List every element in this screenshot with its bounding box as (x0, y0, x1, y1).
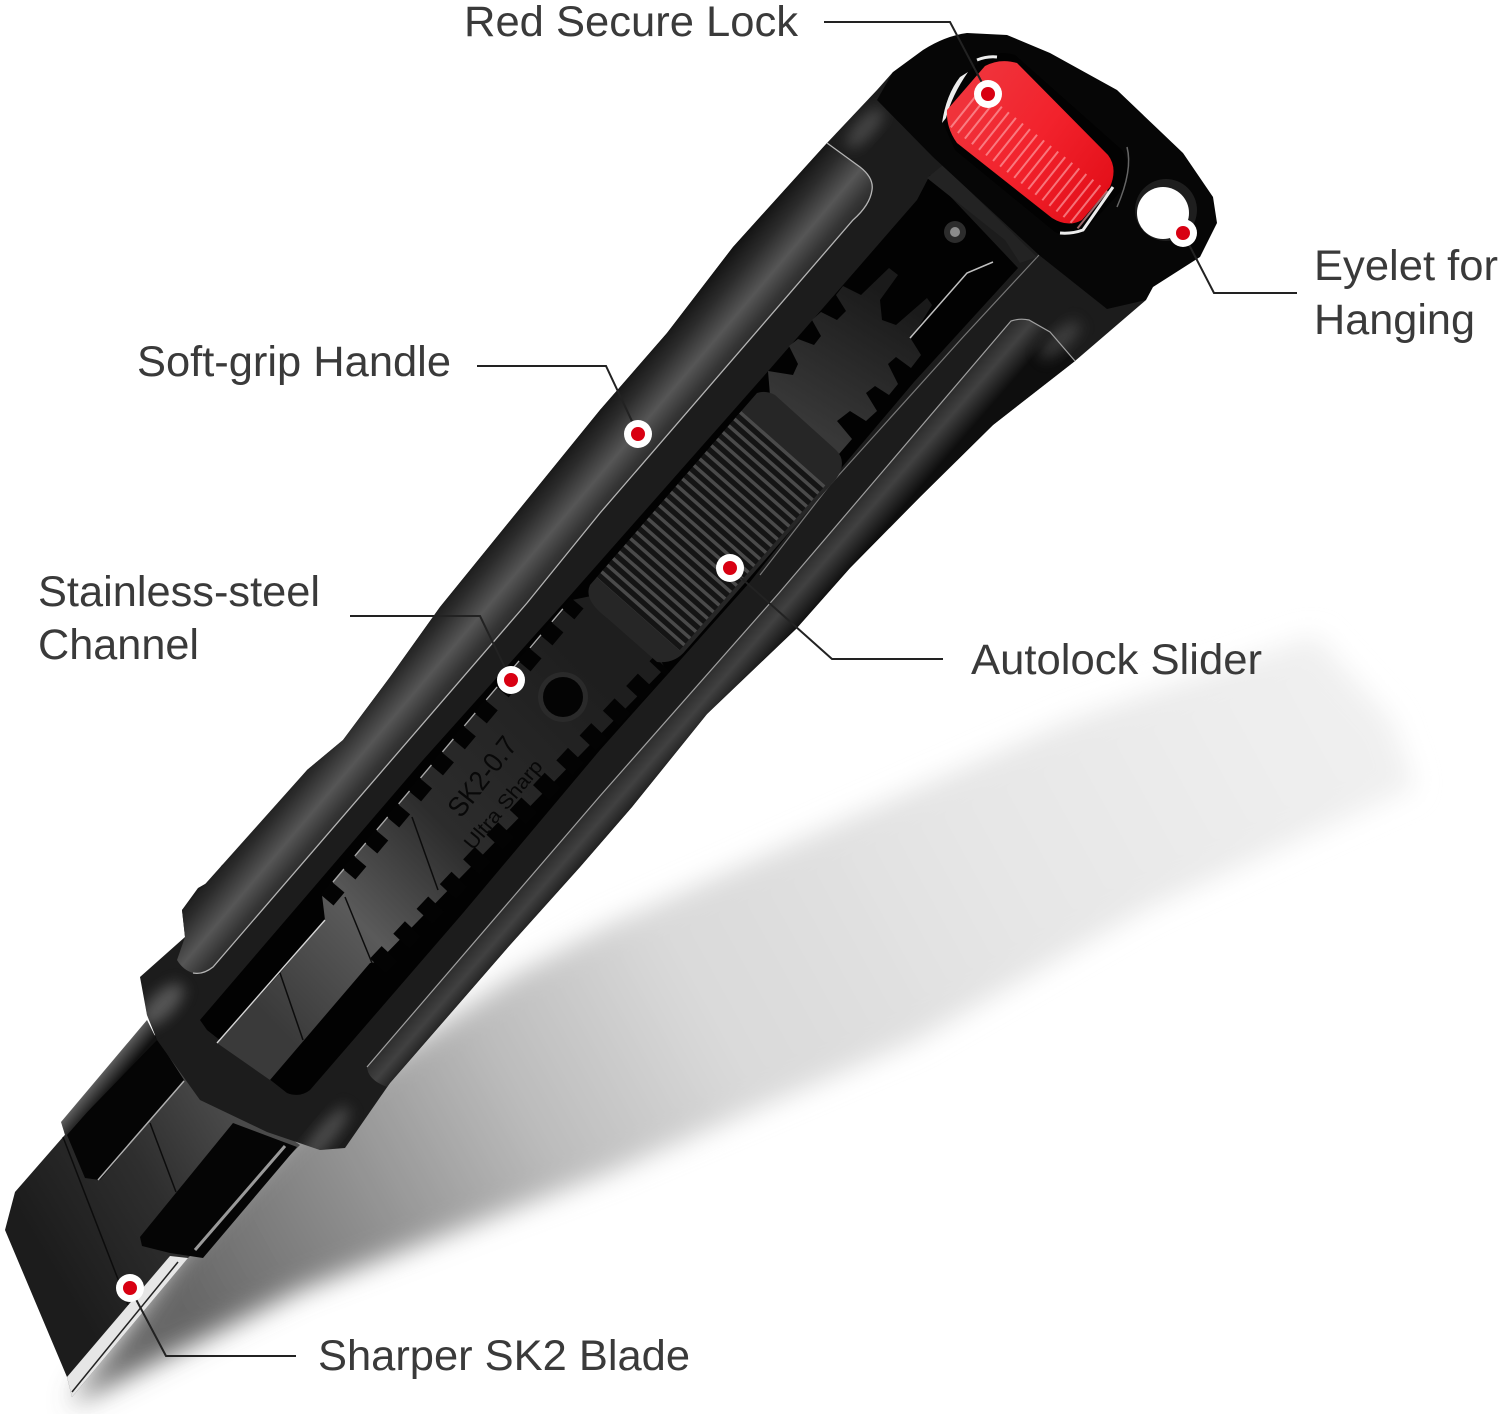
blade hole (538, 672, 588, 722)
callout: Autolock Slider (716, 554, 1262, 684)
callout: Stainless-steel Channel: Stainless-steel (38, 568, 320, 616)
callout: Eyelet for Hanging: Hanging (1314, 296, 1475, 344)
red secure lock (947, 61, 1114, 224)
callout: Sharper SK2 Blade: Sharper SK2 Blade (318, 1332, 690, 1380)
handle body (134, 72, 1146, 1168)
callout: Red Secure Lock (464, 0, 1002, 108)
autolock slider (588, 392, 842, 662)
stainless-steel blade insert: Ultra Sharp (460, 756, 548, 854)
cast shadow (70, 635, 1415, 1405)
frame highlights (134, 103, 1085, 1168)
callout: Eyelet for Hanging: Eyelet for (1314, 242, 1498, 290)
head (877, 33, 1217, 309)
stainless-steel blade insert (217, 590, 665, 1080)
callout: Soft-grip Handle (137, 338, 652, 448)
utility knife (5, 33, 1217, 1397)
channel opening (200, 175, 1039, 1095)
callout: Sharper SK2 Blade (116, 1274, 690, 1380)
callout: Autolock Slider: Autolock Slider (971, 636, 1262, 684)
blade model text: SK2-0.7 (441, 730, 523, 823)
panel: right grip (367, 319, 1075, 1087)
panel: soft grip (177, 143, 872, 973)
eyelet (1135, 179, 1197, 241)
lock cavity (941, 53, 1128, 236)
callout: Soft-grip Handle: Soft-grip Handle (137, 338, 451, 386)
blade (5, 1020, 300, 1397)
callout: Eyelet for Hanging (1169, 219, 1498, 344)
icon: screw (944, 221, 966, 243)
callout: Stainless-steel Channel: Channel (38, 621, 199, 669)
upper steel plate (768, 165, 1037, 454)
callout: Stainless-steel Channel (38, 568, 525, 694)
